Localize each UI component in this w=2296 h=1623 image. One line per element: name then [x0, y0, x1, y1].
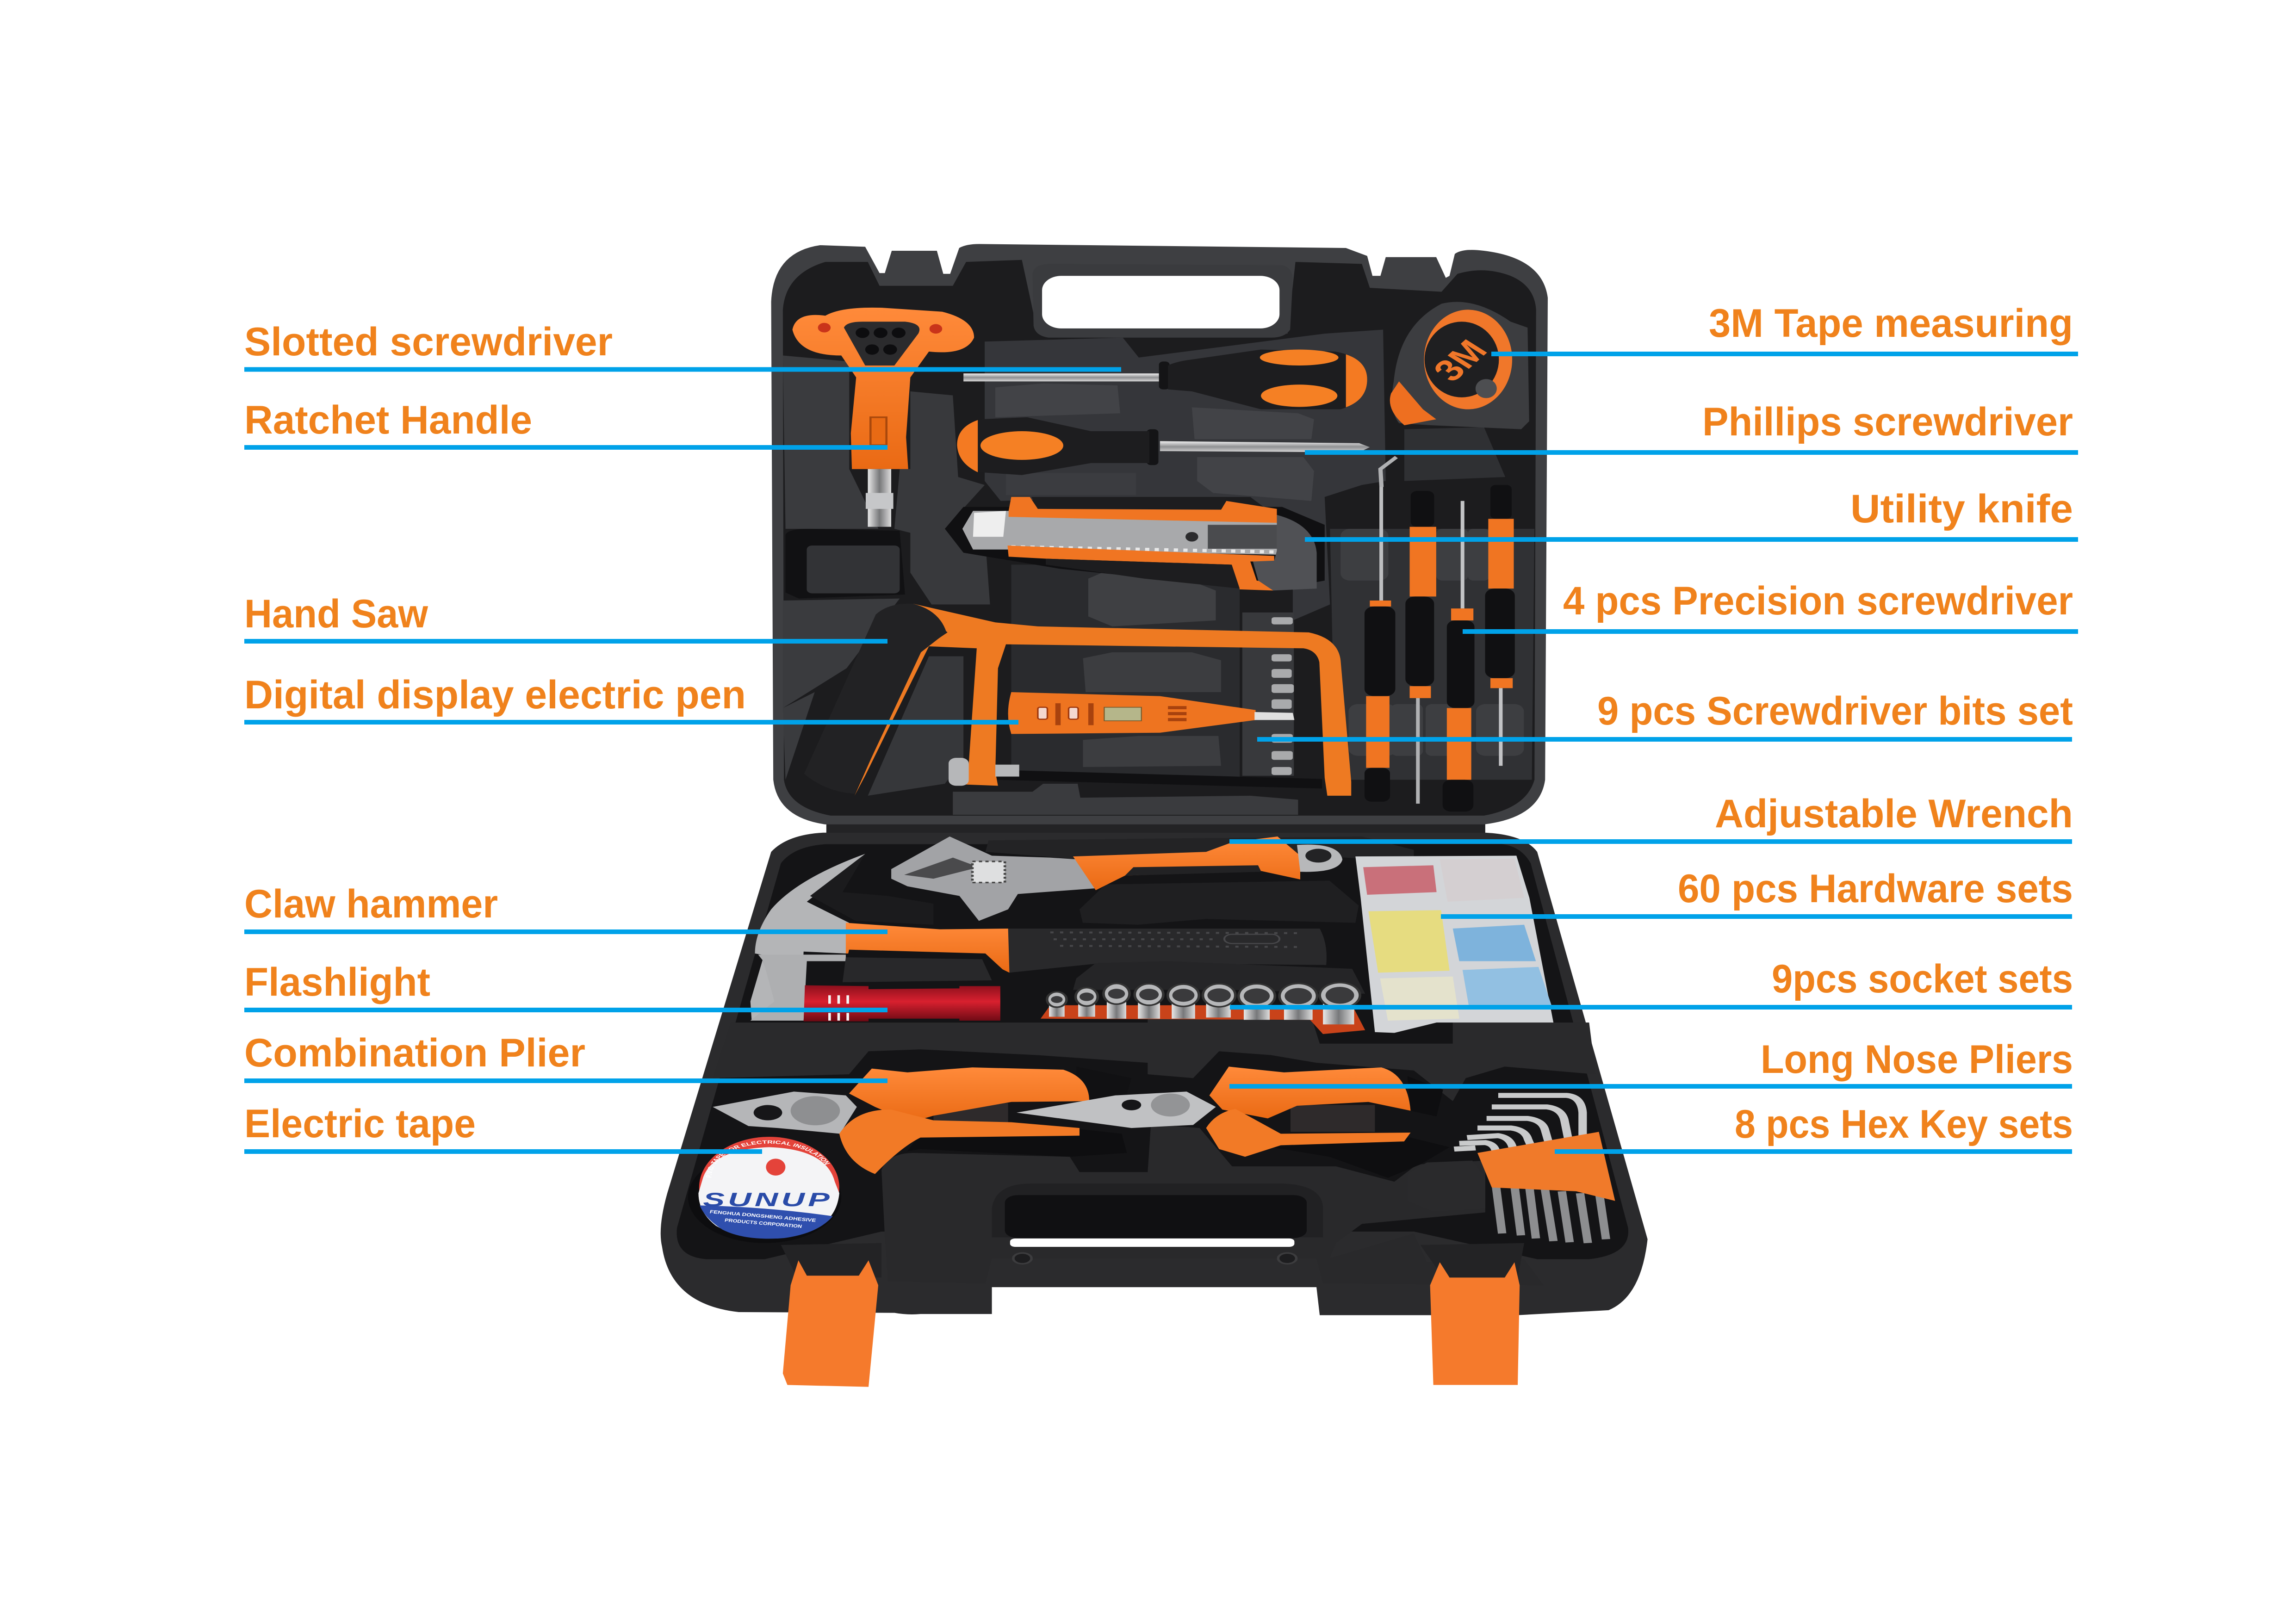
tape band text: FENGHUA DONGSHENG ADHESIVE — [709, 1209, 817, 1223]
label: 60 pcs Hardware sets: 60 pcs Hardware sets — [1678, 867, 2073, 911]
hex key arms — [1454, 1096, 1582, 1151]
handle opening — [1042, 276, 1279, 328]
lower handle — [839, 1109, 1080, 1174]
pen body — [1008, 692, 1256, 734]
label: Digital display electric pen — [244, 673, 1018, 725]
wrench ring — [1297, 844, 1342, 872]
label: 9pcs socket sets: 9pcs socket sets — [1772, 957, 2073, 1001]
tape slider — [1390, 381, 1436, 425]
tape white face — [698, 1147, 839, 1238]
label: 4 pcs Precision screwdriver: 4 pcs Precision screwdriver — [1563, 579, 2073, 623]
label: Hand Saw: Hand Saw — [244, 592, 428, 636]
label: Adjustable Wrench: Adjustable Wrench — [1715, 792, 2073, 836]
box body — [1355, 855, 1553, 1033]
hex key set — [1454, 1096, 1615, 1243]
label: 3M Tape measuring — [1491, 301, 2078, 356]
driver orange — [1488, 519, 1514, 588]
shaft — [1160, 441, 1370, 452]
button one — [1038, 707, 1048, 719]
foam pad seven — [1083, 736, 1221, 767]
foam pad five — [1088, 570, 1216, 626]
foam pad six — [1083, 652, 1221, 692]
label: 9 pcs Screwdriver bits set — [1257, 689, 2073, 742]
label: Combination Plier: Combination Plier — [244, 1031, 585, 1075]
tape brand: SUNUP — [703, 1189, 830, 1211]
black grip rear — [1076, 1066, 1131, 1101]
driver one — [1365, 457, 1396, 802]
grey compartment — [1440, 859, 1524, 902]
button two — [1068, 707, 1078, 719]
lid inner recess — [783, 260, 1536, 816]
latch hinge — [781, 1243, 881, 1277]
holder strip — [1242, 613, 1294, 776]
upper handle — [1210, 1066, 1411, 1118]
tape logo — [766, 1158, 785, 1176]
label: Combination Plier — [244, 1031, 887, 1083]
handle inner recess — [1005, 1195, 1307, 1238]
wrench black inset — [1125, 865, 1261, 876]
ratchet t-handle — [793, 308, 974, 527]
raised foam handle block — [881, 1124, 1544, 1285]
handle bar and stem — [793, 308, 974, 469]
hex key holder — [1477, 1132, 1615, 1201]
hardware box — [1355, 855, 1553, 1033]
driver cap — [1443, 780, 1473, 812]
claw hammer — [751, 854, 1327, 1021]
knife cavity — [945, 507, 1325, 590]
left latch — [781, 1243, 881, 1387]
label: 4 pcs Precision screwdriver — [1463, 579, 2078, 634]
orange tip — [957, 420, 978, 472]
label: Claw hammer — [244, 882, 887, 934]
flashlight bands — [828, 995, 849, 1021]
label: Ratchet Handle — [244, 398, 887, 450]
collar — [1147, 429, 1158, 465]
screw holes — [818, 323, 942, 334]
driver cap — [1411, 491, 1434, 527]
label: 9 pcs Screwdriver bits set: 9 pcs Screwdriver bits set — [1597, 689, 2073, 733]
driver grip — [1405, 596, 1434, 686]
label: 8 pcs Hex Key sets — [1555, 1102, 2073, 1154]
tape shadow — [688, 1151, 841, 1243]
label: Utility knife — [1305, 487, 2078, 542]
wrench handle — [1073, 836, 1300, 890]
3M tape measure — [1390, 302, 1529, 429]
label: Phillips screwdriver — [1305, 400, 2078, 455]
foam block centre — [985, 329, 1386, 620]
latch plate — [783, 1260, 878, 1387]
plier hole — [754, 1105, 782, 1120]
orange grip — [980, 431, 1063, 460]
bit magazine — [844, 322, 919, 365]
wrench jaw gap — [904, 858, 979, 879]
blade hole — [1185, 532, 1198, 542]
label: Flashlight — [244, 960, 887, 1012]
label: Long Nose Pliers: Long Nose Pliers — [1761, 1037, 2073, 1082]
foam column lower left — [783, 692, 815, 780]
pale compartment — [1380, 977, 1459, 1021]
hand saw — [804, 604, 1351, 796]
driver ferrule — [1451, 608, 1473, 620]
saw wing nut — [949, 758, 969, 786]
blade — [962, 511, 1279, 555]
label: Hand Saw — [244, 592, 887, 644]
phillips screwdriver — [957, 417, 1370, 475]
label: 60 pcs Hardware sets — [1441, 867, 2073, 919]
tape blue band — [700, 1206, 833, 1239]
saw grip — [804, 604, 946, 794]
flashlight body — [804, 985, 1000, 1022]
lid shell — [771, 244, 1548, 824]
wrench ring hole — [1305, 849, 1331, 862]
blue compartment lower — [1463, 967, 1551, 1007]
knife back — [1253, 515, 1317, 590]
open tool case photo — [661, 244, 1648, 1387]
hinge strip — [826, 818, 1485, 840]
label: 9pcs socket sets — [1230, 957, 2073, 1010]
tape orange ring — [1424, 310, 1512, 409]
foam pad four — [1006, 473, 1136, 495]
saw blade — [995, 770, 1322, 788]
orange grip bottom — [1261, 384, 1337, 407]
driver grip — [1365, 607, 1395, 696]
driver grip — [1485, 588, 1515, 678]
label: Claw hammer: Claw hammer — [244, 882, 498, 926]
foam strip beside saw — [868, 656, 963, 796]
driver ferrule — [1370, 601, 1391, 607]
bit holder — [1242, 613, 1294, 776]
tape band text: PRODUCTS CORPORATION — [724, 1217, 802, 1229]
plier hole — [1122, 1100, 1141, 1110]
handle opening — [992, 1183, 1323, 1237]
plier joint — [1151, 1093, 1190, 1116]
digital display electric pen — [1008, 692, 1294, 734]
tape lock — [1476, 379, 1497, 398]
driver cap — [1365, 768, 1390, 802]
top foam block — [986, 836, 1414, 861]
hammer claw shadow — [810, 854, 933, 925]
socket set — [1041, 983, 1365, 1034]
driver orange — [1409, 527, 1436, 596]
hex key legs — [1496, 1183, 1606, 1243]
foam region centre lower — [1011, 564, 1240, 780]
label: Flashlight: Flashlight — [244, 960, 430, 1004]
tape ring text: P.V.C. TAPE FOR ELECTRICAL INSULATION — [704, 1139, 832, 1178]
orange tip — [1346, 354, 1367, 407]
driver orange — [1447, 708, 1471, 780]
right latch — [1421, 1243, 1524, 1385]
driver ferrule — [1409, 686, 1431, 698]
wrench knurl — [973, 861, 1005, 883]
bit holes — [856, 328, 906, 355]
saw frame — [855, 604, 1351, 796]
label: Phillips screwdriver: Phillips screwdriver — [1702, 400, 2073, 444]
driver shaft — [1416, 698, 1420, 804]
lower case tray — [661, 818, 1648, 1387]
tape brand: 3M — [1425, 334, 1496, 388]
upper handle — [849, 1067, 1089, 1122]
ratchet switch — [870, 417, 887, 445]
driver grip — [1447, 620, 1475, 708]
plier head — [1017, 1091, 1216, 1128]
red compartment — [1363, 865, 1437, 895]
plier joint — [791, 1096, 840, 1125]
tape red face — [699, 1137, 839, 1238]
shank collar — [866, 493, 894, 509]
block under wrench — [1080, 880, 1359, 925]
label: Adjustable Wrench — [1229, 792, 2073, 844]
hammer head — [751, 854, 865, 1021]
driver four — [1485, 485, 1515, 766]
label: Slotted screwdriver: Slotted screwdriver — [244, 320, 613, 364]
adjustable wrench — [891, 836, 1342, 921]
top rail dark — [1031, 497, 1226, 510]
upper case lid — [771, 244, 1548, 824]
latch plate — [1430, 1262, 1520, 1385]
foam pad two — [1192, 407, 1314, 439]
tape centre — [1425, 322, 1499, 397]
right foam block — [1408, 1161, 1485, 1212]
tape body — [1392, 302, 1529, 429]
yellow compartment — [1368, 910, 1450, 973]
driver bent tip — [1380, 457, 1396, 487]
display — [1104, 707, 1142, 721]
long nose pliers — [1017, 1066, 1450, 1178]
top rail — [1009, 497, 1277, 523]
blue compartment — [1453, 925, 1536, 961]
driver shaft — [1379, 485, 1383, 601]
orange grip top — [1260, 350, 1339, 365]
foam block highlight — [843, 957, 992, 982]
driver three — [1443, 501, 1475, 812]
slotted screwdriver — [963, 350, 1367, 409]
label: Long Nose Pliers — [1229, 1037, 2073, 1089]
latch hinge — [1421, 1243, 1524, 1277]
label: 8 pcs Hex Key sets: 8 pcs Hex Key sets — [1735, 1102, 2073, 1146]
flashlight — [804, 985, 1000, 1022]
label: Electric tape: Electric tape — [244, 1102, 476, 1146]
saw cavity inner — [807, 545, 900, 593]
socket holder — [1041, 1005, 1365, 1034]
socket holes — [1051, 987, 1354, 1004]
bottom dark — [1046, 559, 1240, 588]
block above sockets — [1073, 961, 1365, 994]
socket bodies — [1049, 994, 1354, 1024]
socket openings — [1047, 983, 1360, 1009]
label: Electric tape — [244, 1102, 762, 1154]
tray recess — [676, 844, 1628, 1259]
bottom rail — [1007, 545, 1274, 590]
handle slit — [1010, 1239, 1294, 1247]
grip badge — [1224, 934, 1279, 943]
driver shaft — [1461, 501, 1464, 608]
grip texture — [1050, 932, 1297, 947]
precision pads — [1340, 529, 1524, 756]
foam pad three — [1197, 457, 1314, 501]
tape band text — [709, 1209, 817, 1229]
plier head — [713, 1091, 857, 1134]
foam block diagonal — [894, 391, 990, 605]
black grip upper — [1408, 1076, 1443, 1116]
bits — [1272, 617, 1294, 775]
foam block right — [1291, 1105, 1375, 1132]
label: Digital display electric pen: Digital display electric pen — [244, 673, 746, 717]
wrench head — [891, 836, 1096, 921]
tape pad — [1404, 427, 1505, 481]
lower lip — [953, 784, 1298, 815]
collar — [1159, 361, 1170, 390]
foam column right — [1330, 529, 1534, 780]
blade teeth — [1011, 547, 1274, 552]
label: Slotted screwdriver — [244, 320, 1121, 372]
hammer grip black — [1008, 929, 1327, 973]
driver ferrule — [1490, 678, 1513, 688]
handle surround — [1032, 264, 1293, 338]
driver cap — [1490, 485, 1512, 519]
blade tip highlight — [973, 511, 1006, 537]
label: Utility knife: Utility knife — [1850, 487, 2073, 531]
foam column left — [783, 599, 900, 708]
hammer neck — [751, 954, 846, 1021]
lower handle — [1206, 1109, 1411, 1157]
driver orange — [1366, 696, 1390, 768]
handle — [1168, 350, 1367, 409]
shaft — [963, 373, 1163, 381]
label: Ratchet Handle: Ratchet Handle — [244, 398, 532, 442]
foam between pliers — [933, 1103, 1008, 1126]
foam pad one — [995, 384, 1120, 417]
utility knife — [945, 497, 1325, 590]
driver shaft — [1499, 688, 1502, 766]
label: 3M Tape measuring: 3M Tape measuring — [1709, 301, 2073, 346]
blade grip section — [1208, 525, 1277, 549]
saw clamp — [995, 765, 1019, 777]
black grip — [907, 1128, 1127, 1157]
pen markings — [1055, 703, 1186, 725]
raised foam band — [713, 1013, 1595, 1101]
foam block under hammer — [804, 950, 1006, 1022]
tray shell — [661, 833, 1648, 1315]
combination plier — [713, 1066, 1131, 1174]
ratchet shank — [868, 469, 891, 527]
handle — [958, 417, 1149, 475]
driver two — [1405, 491, 1436, 804]
handle screws — [1013, 1253, 1297, 1264]
foam block left — [783, 355, 878, 529]
electric tape roll — [688, 1137, 841, 1243]
saw cavity block — [786, 529, 905, 599]
pen tip — [1254, 712, 1294, 720]
hammer grip orange — [846, 923, 1011, 973]
black grip — [1271, 1138, 1450, 1178]
precision screwdrivers — [1365, 457, 1515, 812]
